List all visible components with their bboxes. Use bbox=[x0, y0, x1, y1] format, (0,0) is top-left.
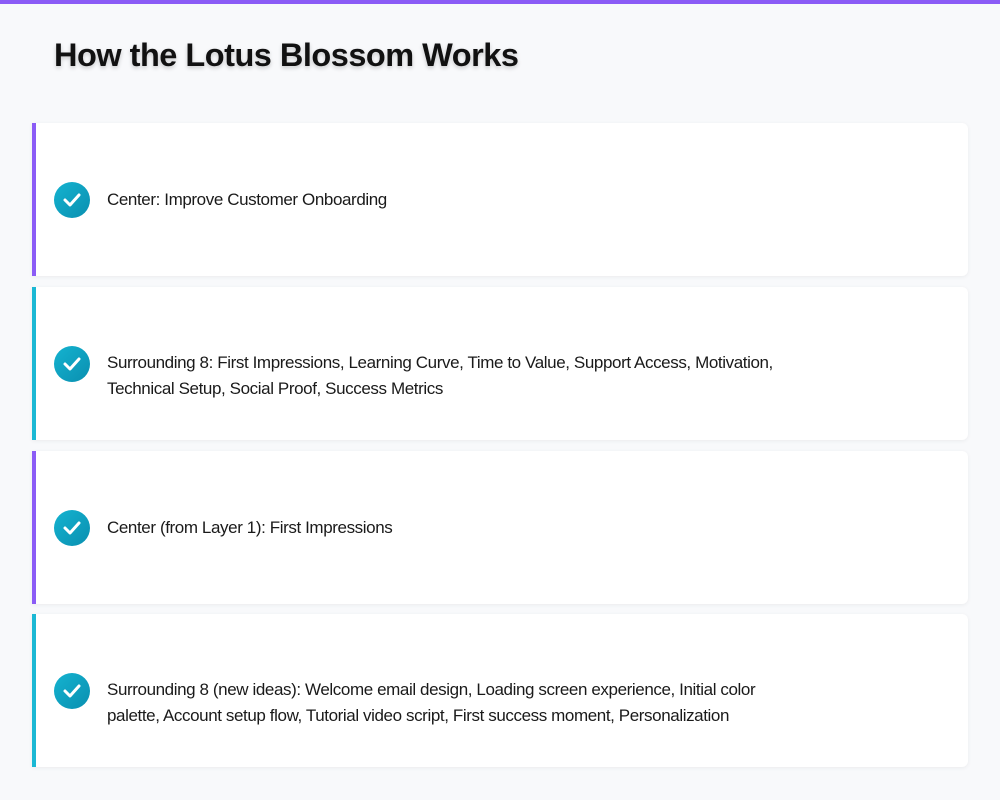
text: Center: Improve Customer Onboarding bbox=[107, 190, 387, 208]
card: center layer 1 bbox=[32, 451, 968, 604]
text: Surrounding 8: First Impressions, Learning Curve, Time to Value, Support Access, Motivation, Technical Setup, Social Proof, Success Metrics bbox=[107, 352, 773, 398]
icon: check bbox=[54, 182, 90, 218]
icon: check bbox=[54, 510, 90, 546]
icon: check bbox=[54, 672, 90, 708]
icon: check bbox=[54, 346, 90, 382]
card: surrounding new ideas bbox=[32, 614, 968, 767]
card: center bbox=[32, 123, 968, 276]
text: Center (from Layer 1): First Impressions bbox=[107, 518, 392, 536]
title: How the Lotus Blossom Works bbox=[54, 37, 518, 73]
text: Surrounding 8 (new ideas): Welcome email design, Loading screen experience, Initial color palette, Account setup flow, Tutorial video script, First success moment, Personalization bbox=[107, 680, 755, 724]
card: surrounding 8 bbox=[32, 287, 968, 440]
